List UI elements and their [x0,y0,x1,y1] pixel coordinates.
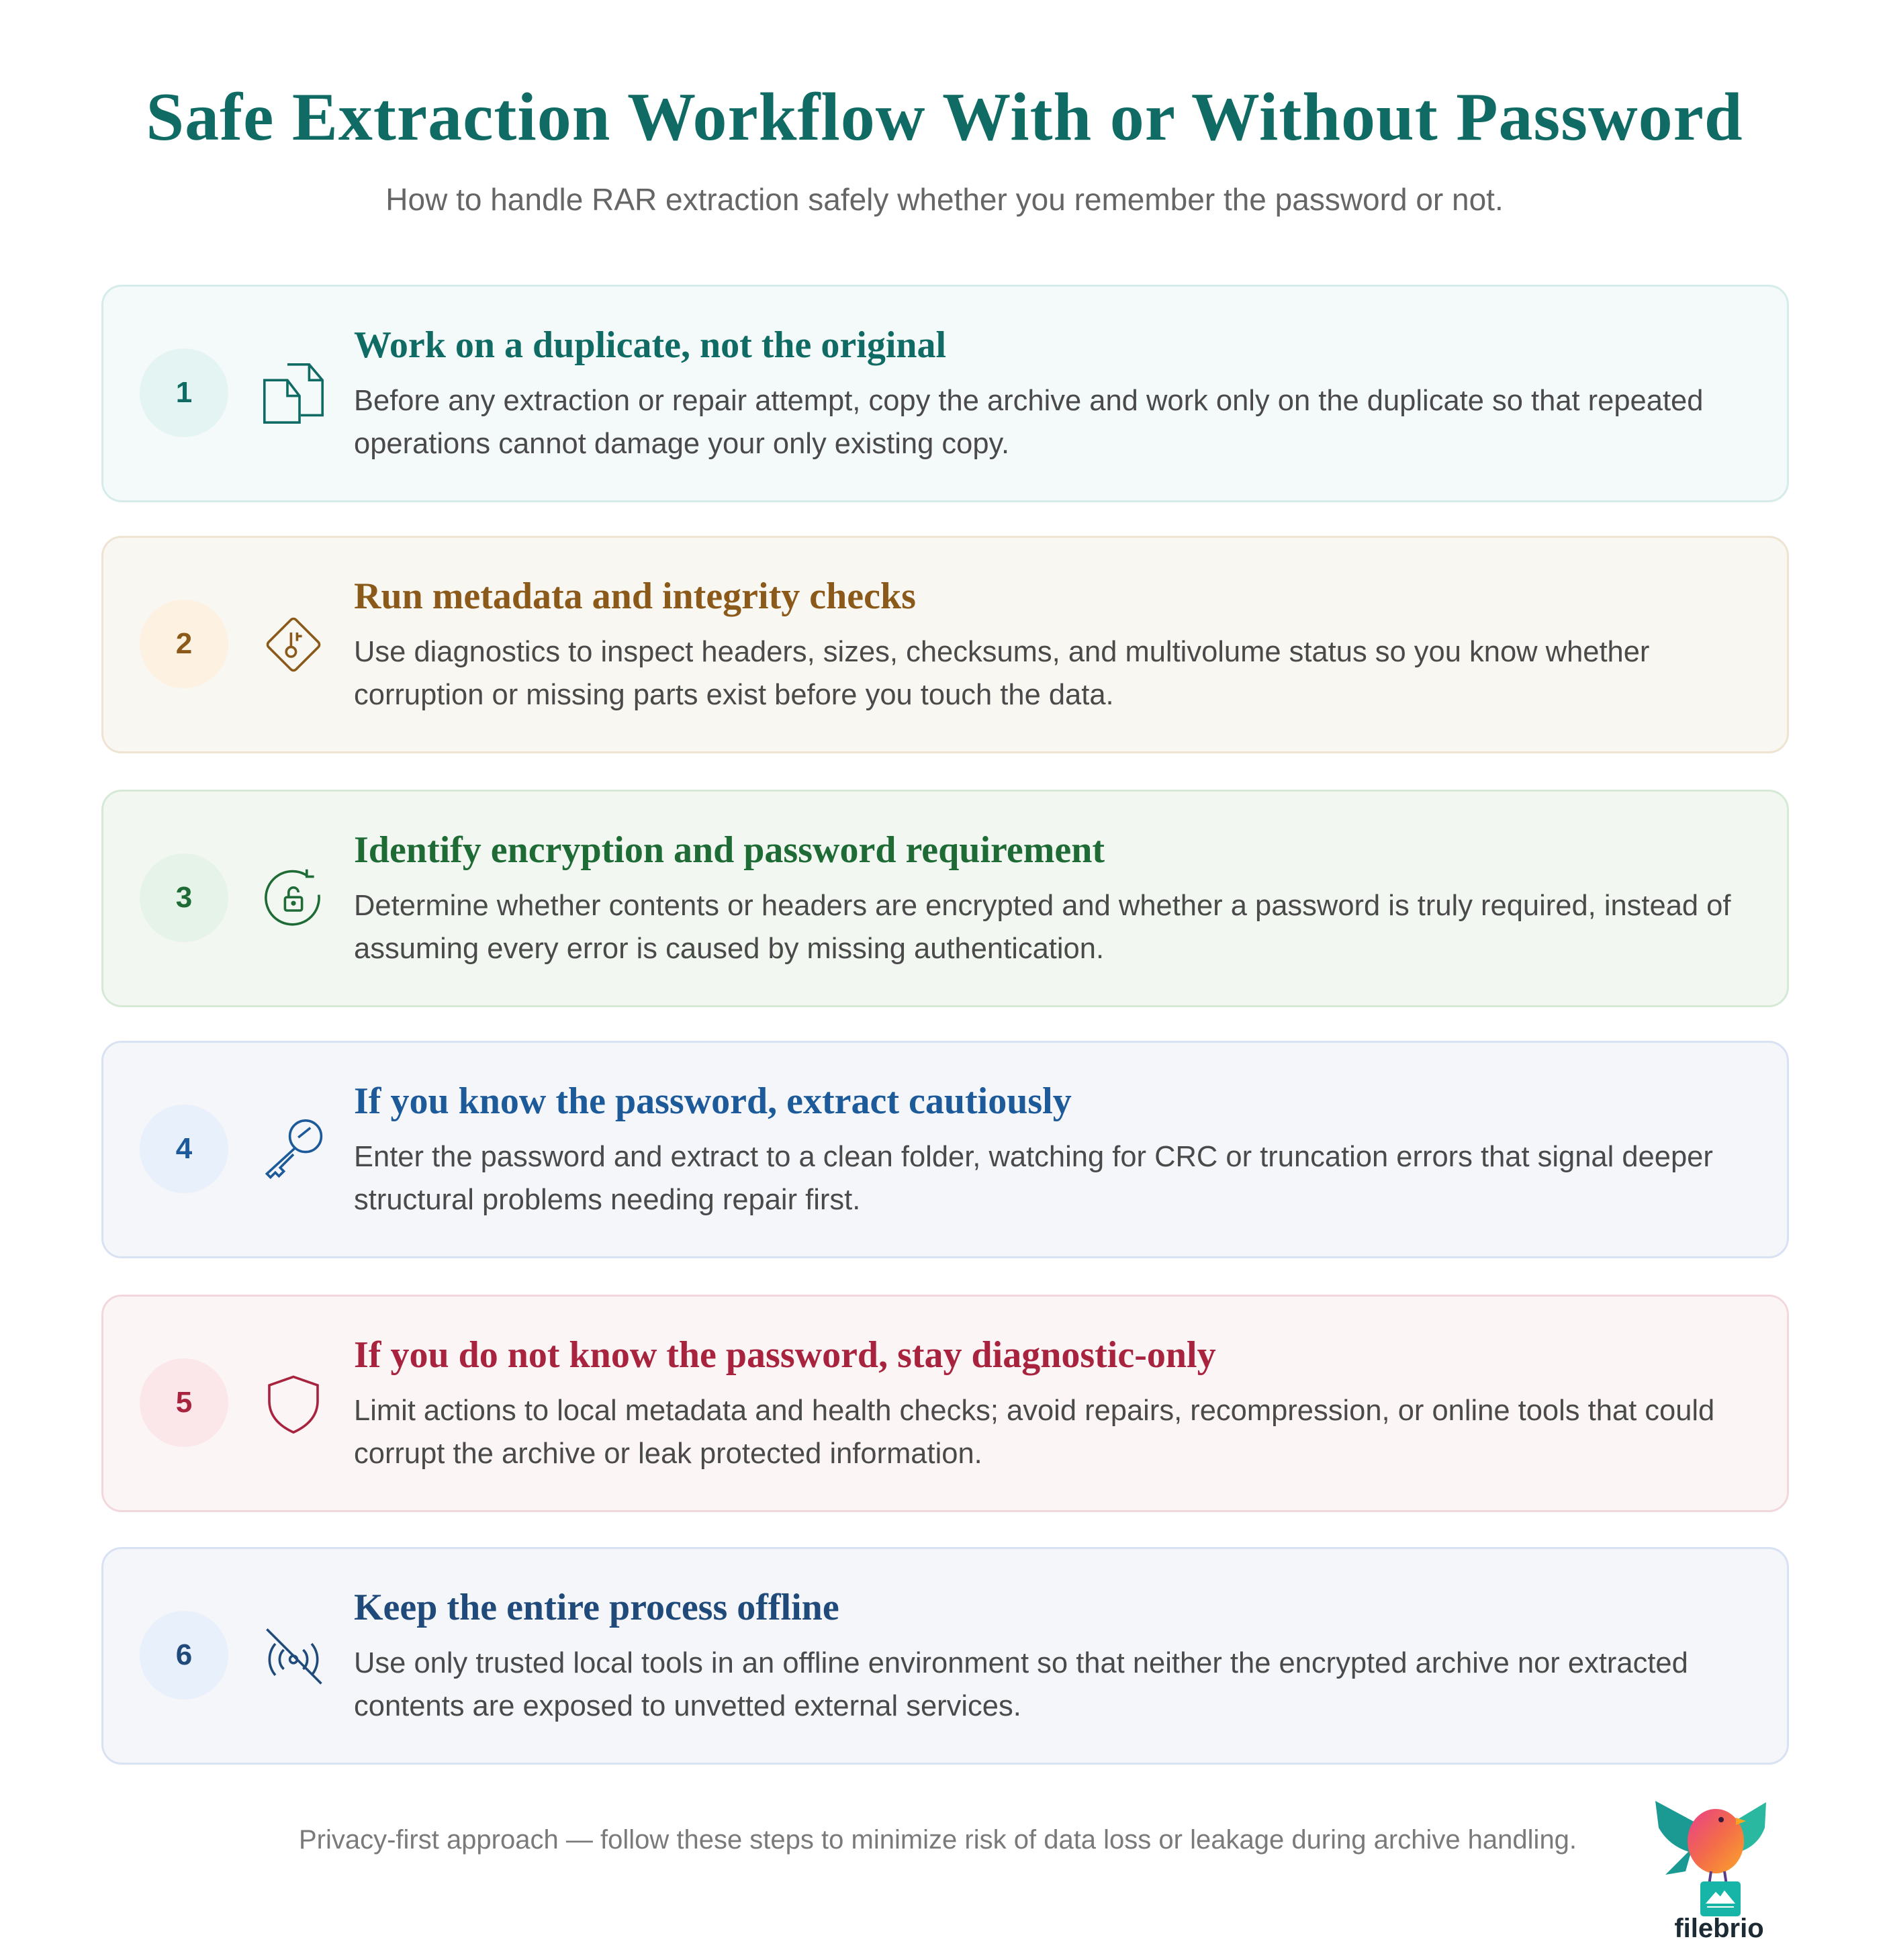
heading: Keep the entire process offline [354,1587,839,1628]
icon: key [265,1119,322,1179]
icon: shield [268,1375,319,1434]
panel: step 1 [101,285,1789,502]
icon: duplicate files [263,363,324,424]
footer note: Privacy-first approach — follow these steps to minimize risk of data loss or leakage during archive handling. [299,1825,1577,1855]
body text: Limit actions to local metadata and health checks; avoid repairs, recompression, or online tools that could corrupt the archive or leak protected information. [354,1395,1714,1470]
heading: Identify encryption and password requirement [354,829,1105,871]
number badge 4: 4 [176,1132,192,1165]
panel: step 5 [101,1295,1789,1512]
number badge 1 [140,348,228,437]
icon: offline signal [266,1628,322,1685]
heading: Run metadata and integrity checks [354,575,916,617]
heading: If you do not know the password, stay diagnostic-only [354,1334,1216,1376]
number badge 3: 3 [176,881,192,914]
icon: diagnostics diamond [266,618,321,671]
panel: step 2 [101,536,1789,753]
body text: Use diagnostics to inspect headers, sizes, checksums, and multivolume status so you know whether corruption or missing parts exist before you touch the data. [354,636,1649,711]
body text: Determine whether contents or headers are encrypted and whether a password is truly required, instead of assuming every error is caused by missing authentication. [354,890,1731,965]
icon: unlock cycle [265,869,320,926]
number badge 3 [140,853,228,942]
number badge 6 [140,1611,228,1699]
number badge 4 [140,1105,228,1193]
panel: step 6 [101,1547,1789,1765]
body text: Before any extraction or repair attempt, copy the archive and work only on the duplicate so that repeated operations cannot damage your only existing copy. [354,385,1703,460]
panel: step 4 [101,1041,1789,1258]
title: Safe Extraction Workflow With or Without Password [146,79,1743,155]
number badge 1: 1 [176,376,192,409]
body text: Use only trusted local tools in an offline environment so that neither the encrypted archive nor extracted contents are exposed to unvetted external services. [354,1647,1688,1722]
heading: Work on a duplicate, not the original [354,324,946,366]
logo: filebrio [1655,1801,1766,1942]
body text: Enter the password and extract to a clean folder, watching for CRC or truncation errors that signal deeper structural problems needing repair first. [354,1141,1713,1216]
number badge 6: 6 [176,1638,192,1671]
number badge 5 [140,1358,228,1447]
subtitle: How to handle RAR extraction safely whether you remember the password or not. [385,182,1504,217]
number badge 2: 2 [176,627,192,660]
number badge 5: 5 [176,1386,192,1419]
panel: step 3 [101,790,1789,1007]
heading: If you know the password, extract cautiously [354,1080,1072,1122]
number badge 2 [140,600,228,688]
